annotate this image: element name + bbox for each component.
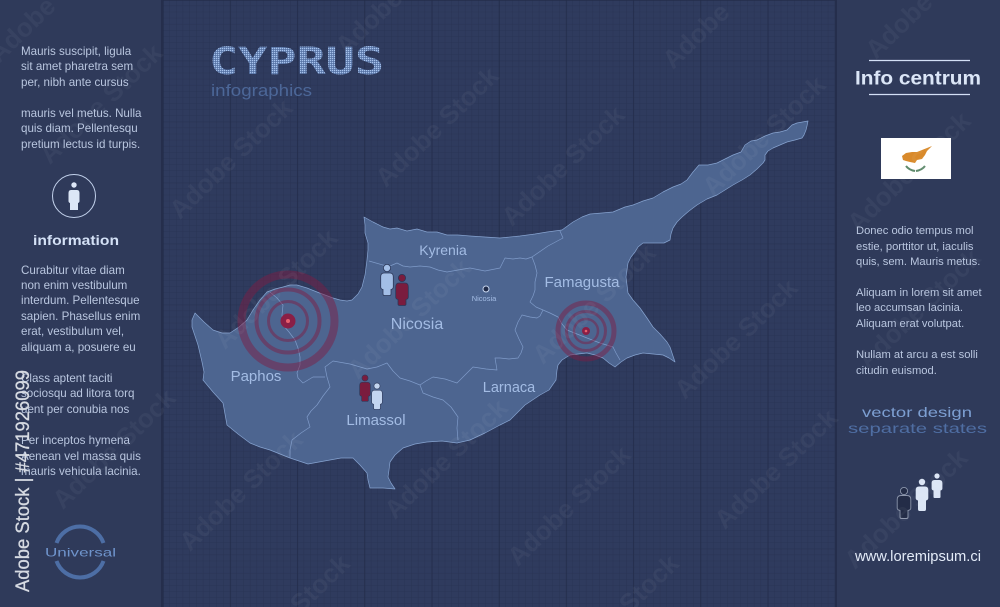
text block: right: estie, porttitor ut, iaculis bbox=[856, 241, 974, 253]
caption: vector design: vector design bbox=[862, 404, 972, 420]
text block: left middle: non enim vestibulum bbox=[21, 279, 127, 292]
text block: right: Aliquam erat volutpat. bbox=[856, 318, 964, 330]
watermarks: Adobe Stock bbox=[33, 37, 169, 170]
badge: Universal: Universal bbox=[45, 546, 116, 560]
watermarks: Adobe Stock bbox=[163, 92, 299, 225]
watermarks: Adobe Stock bbox=[851, 242, 987, 375]
text block: right: Nullam at arcu a est solli bbox=[856, 349, 978, 361]
text block: left bottom: uent per conubia nos bbox=[21, 403, 129, 416]
icon: people Nicosia bbox=[381, 264, 408, 306]
text block: right: Donec odio tempus mol bbox=[856, 225, 974, 237]
title: CYPRUS bbox=[209, 40, 384, 83]
text block: left bottom: Aenean vel massa quis bbox=[21, 450, 141, 463]
subtitle: infographics bbox=[211, 81, 312, 100]
target marker: east bbox=[558, 303, 614, 359]
watermarks: Adobe Stock bbox=[708, 402, 844, 535]
text block: left top: per, nibh ante cursus bbox=[21, 76, 129, 89]
badge: Universal bbox=[45, 527, 116, 577]
text block: left bottom: Per inceptos hymena bbox=[21, 434, 130, 447]
region label: Kyrenia: Kyrenia bbox=[419, 242, 467, 258]
icon: people Limassol bbox=[360, 375, 382, 409]
region label: Famagusta: Famagusta bbox=[544, 274, 620, 291]
watermarks: Adobe Stock bbox=[668, 272, 804, 405]
text block: left top bbox=[21, 45, 142, 151]
target marker: west bbox=[242, 274, 334, 368]
district borders bbox=[270, 231, 620, 458]
website: www.loremipsum.ci bbox=[854, 548, 981, 565]
region label: Larnaca: Larnaca bbox=[483, 380, 536, 396]
text block: left top: mauris vel metus. Nulla bbox=[21, 107, 142, 120]
watermarks: Adobe Stock bbox=[46, 382, 182, 515]
text block: left bottom: mauris vehicula lacinia. bbox=[21, 465, 141, 478]
icon: flag of Cyprus bbox=[881, 138, 951, 179]
capital marker: Nicosia bbox=[472, 286, 497, 303]
island silhouette bbox=[192, 121, 808, 489]
map: Cyprus bbox=[192, 121, 808, 489]
text block: left middle: Curabitur vitae diam bbox=[21, 264, 125, 277]
watermarks: Adobe Stock bbox=[369, 60, 505, 193]
caption: separate states: separate states bbox=[848, 420, 987, 436]
text block: left top: sit amet pharetra sem bbox=[21, 60, 133, 73]
region label: Nicosia: Nicosia bbox=[391, 316, 443, 333]
text block: right: citudin euismod. bbox=[856, 365, 937, 377]
text block: right bbox=[856, 225, 982, 377]
region label: Limassol: Limassol bbox=[346, 412, 406, 429]
text block: left bottom: sociosqu ad litora torq bbox=[21, 387, 134, 400]
panel: grid ocean bbox=[162, 0, 836, 607]
watermarks: Adobe Stock bbox=[501, 439, 637, 572]
watermarks: Adobe Stock bbox=[526, 237, 662, 370]
text block: left top: Mauris suscipit, ligula bbox=[21, 45, 132, 58]
text block: left middle: interdum. Pellentesque bbox=[21, 294, 140, 307]
text block: right: quis, sem. Mauris metus. bbox=[856, 256, 980, 268]
watermarks: Adobe Stock bbox=[838, 442, 974, 575]
text block: left bottom bbox=[21, 372, 141, 478]
text block: right: leo accumsan lacinia. bbox=[856, 302, 963, 314]
text block: left middle: sapien. Phasellus enim bbox=[21, 310, 140, 323]
text block: left top: pretium lectus id turpis. bbox=[21, 138, 140, 151]
heading: Info centrum: Info centrum bbox=[855, 68, 981, 90]
title bbox=[209, 40, 384, 100]
watermarks: Adobe Stock bbox=[173, 424, 309, 557]
watermarks: Adobe Stock bbox=[341, 252, 477, 385]
watermarks: Adobe Stock bbox=[495, 99, 631, 232]
text block: left middle: aliquam a, posuere eu bbox=[21, 341, 136, 354]
text block: left top: quis diam. Pellentesqu bbox=[21, 122, 138, 135]
icon: person in circle bbox=[52, 174, 96, 218]
text block: left middle: erat, vestibulum vel, bbox=[21, 325, 124, 338]
heading: information: information bbox=[33, 232, 119, 248]
text block: left middle bbox=[21, 264, 140, 354]
watermarks: Adobe Stock bbox=[208, 222, 344, 355]
watermarks: Adobe Stock bbox=[378, 392, 514, 525]
stock id vertical label: Adobe Stock | #471926099 bbox=[13, 370, 34, 592]
icon: three people bbox=[897, 473, 942, 518]
watermarks: Adobe Stock bbox=[841, 105, 977, 238]
region label: Paphos: Paphos bbox=[231, 368, 281, 385]
watermarks: Adobe Stock bbox=[696, 69, 832, 202]
heading: Info centrum bbox=[855, 60, 981, 94]
capital marker: Nicosia: Nicosia bbox=[472, 294, 497, 303]
text block: left bottom: Class aptent taciti bbox=[21, 372, 113, 385]
text block: right: Aliquam in lorem sit amet bbox=[856, 287, 982, 299]
